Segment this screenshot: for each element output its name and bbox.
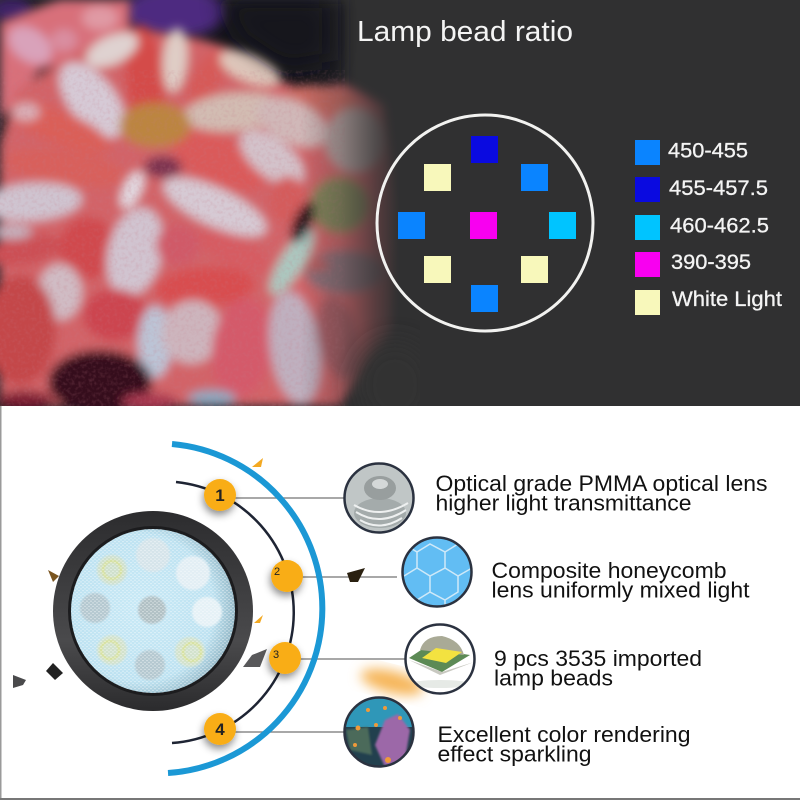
badge 3: 3: [273, 649, 279, 661]
lamp: [53, 511, 253, 711]
coral base: [0, 26, 400, 406]
icon: LED bead: [405, 624, 475, 694]
legend: 460-462.5: [670, 214, 769, 238]
decorative shards: [13, 458, 365, 688]
icon: optical lens: [344, 463, 414, 533]
badge 1: [204, 479, 236, 511]
text: honeycomb lens: [492, 558, 750, 602]
diagram: lamp bead layout: [377, 115, 593, 331]
legend: [635, 140, 782, 315]
text: LED beads: [494, 646, 702, 690]
blue outer arc: [168, 444, 322, 773]
badge 4: [204, 713, 236, 745]
orange glow: [358, 664, 426, 700]
text: honeycomb lens: Composite honeycomb: [492, 558, 726, 583]
legend: 455-457.5: [669, 177, 768, 200]
legend: 450-455: [668, 140, 748, 162]
text: LED beads: 9 pcs 3535 imported: [494, 646, 702, 671]
coral photograph: [0, 0, 394, 406]
panel: dark header background: [0, 0, 800, 406]
text: colour rendering: Excellent color rendering: [438, 722, 690, 747]
text: optical lens: Optical grade PMMA optical lens: [436, 471, 768, 496]
heading: Lamp bead ratio: Lamp bead ratio: [357, 16, 573, 48]
dark base: [48, 350, 152, 414]
badge 4: 4: [215, 720, 225, 739]
dark inner arc: [172, 482, 294, 743]
badge 3: [269, 642, 301, 674]
text: LED beads: lamp beads: [494, 666, 613, 690]
icon: reef: [344, 697, 414, 767]
badge 2: [271, 560, 303, 592]
legend: 390-395: [671, 251, 751, 274]
text: colour rendering: [438, 722, 690, 766]
text: honeycomb lens: lens uniformly mixed light: [492, 578, 750, 602]
centre and fold: [119, 103, 191, 147]
panel: white lower background: [0, 406, 800, 800]
icon: honeycomb lens: [402, 537, 472, 610]
legend: White Light: [672, 288, 782, 311]
badge 1: 1: [215, 486, 225, 505]
radial lobes: [123, 20, 166, 110]
leader lines: [232, 498, 405, 732]
text: optical lens: higher light transmittance: [436, 490, 692, 516]
text: colour rendering: effect sparkling: [438, 742, 592, 766]
text: optical lens: [436, 471, 768, 516]
badge 2: 2: [274, 566, 280, 578]
bubble coral: [0, 0, 130, 120]
